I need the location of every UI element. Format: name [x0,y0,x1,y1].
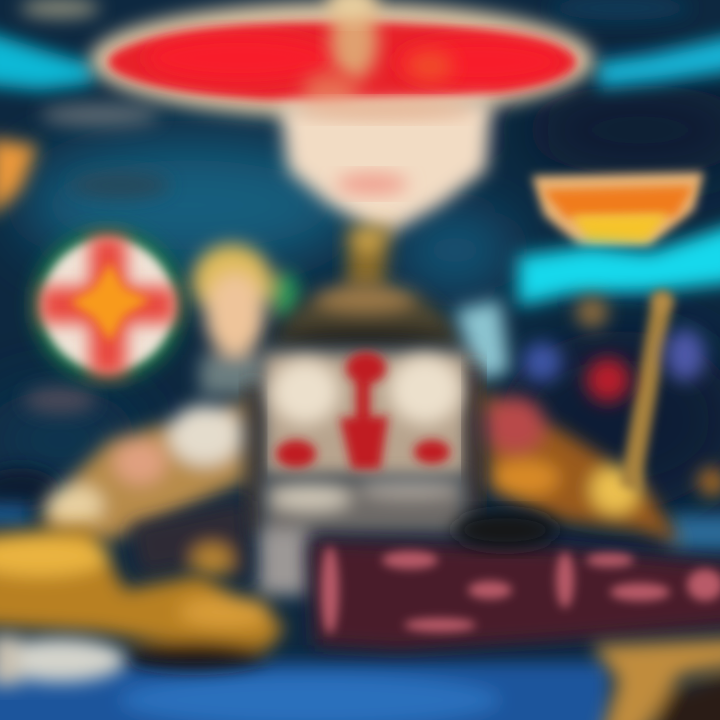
floor: blue base [0,505,720,720]
poker chip [32,229,184,381]
dark gap under arm [130,500,250,580]
pale glass right of dome [455,300,510,380]
checkered red cloth [310,512,720,650]
blonde figure [192,244,299,395]
machine dome [270,282,464,345]
cream funnel with pink centre [280,100,492,236]
top left cyan streak [0,30,98,90]
arm right gold and red [482,390,682,545]
machine base [258,478,467,595]
top right cyan streak [596,34,720,88]
small game symbols right [522,296,720,496]
gold corner bottom right [592,638,720,720]
gold pile bottom left [0,525,285,669]
golden lever [620,290,674,490]
slot machine body [244,352,482,535]
orange fragment left [0,138,38,218]
cream and gold arm left [40,400,245,540]
white chips bottom left [0,635,126,685]
red ceiling disc [90,0,594,118]
orange bowl right [532,172,704,246]
gold stem [346,224,392,292]
cyan band right [518,222,720,306]
